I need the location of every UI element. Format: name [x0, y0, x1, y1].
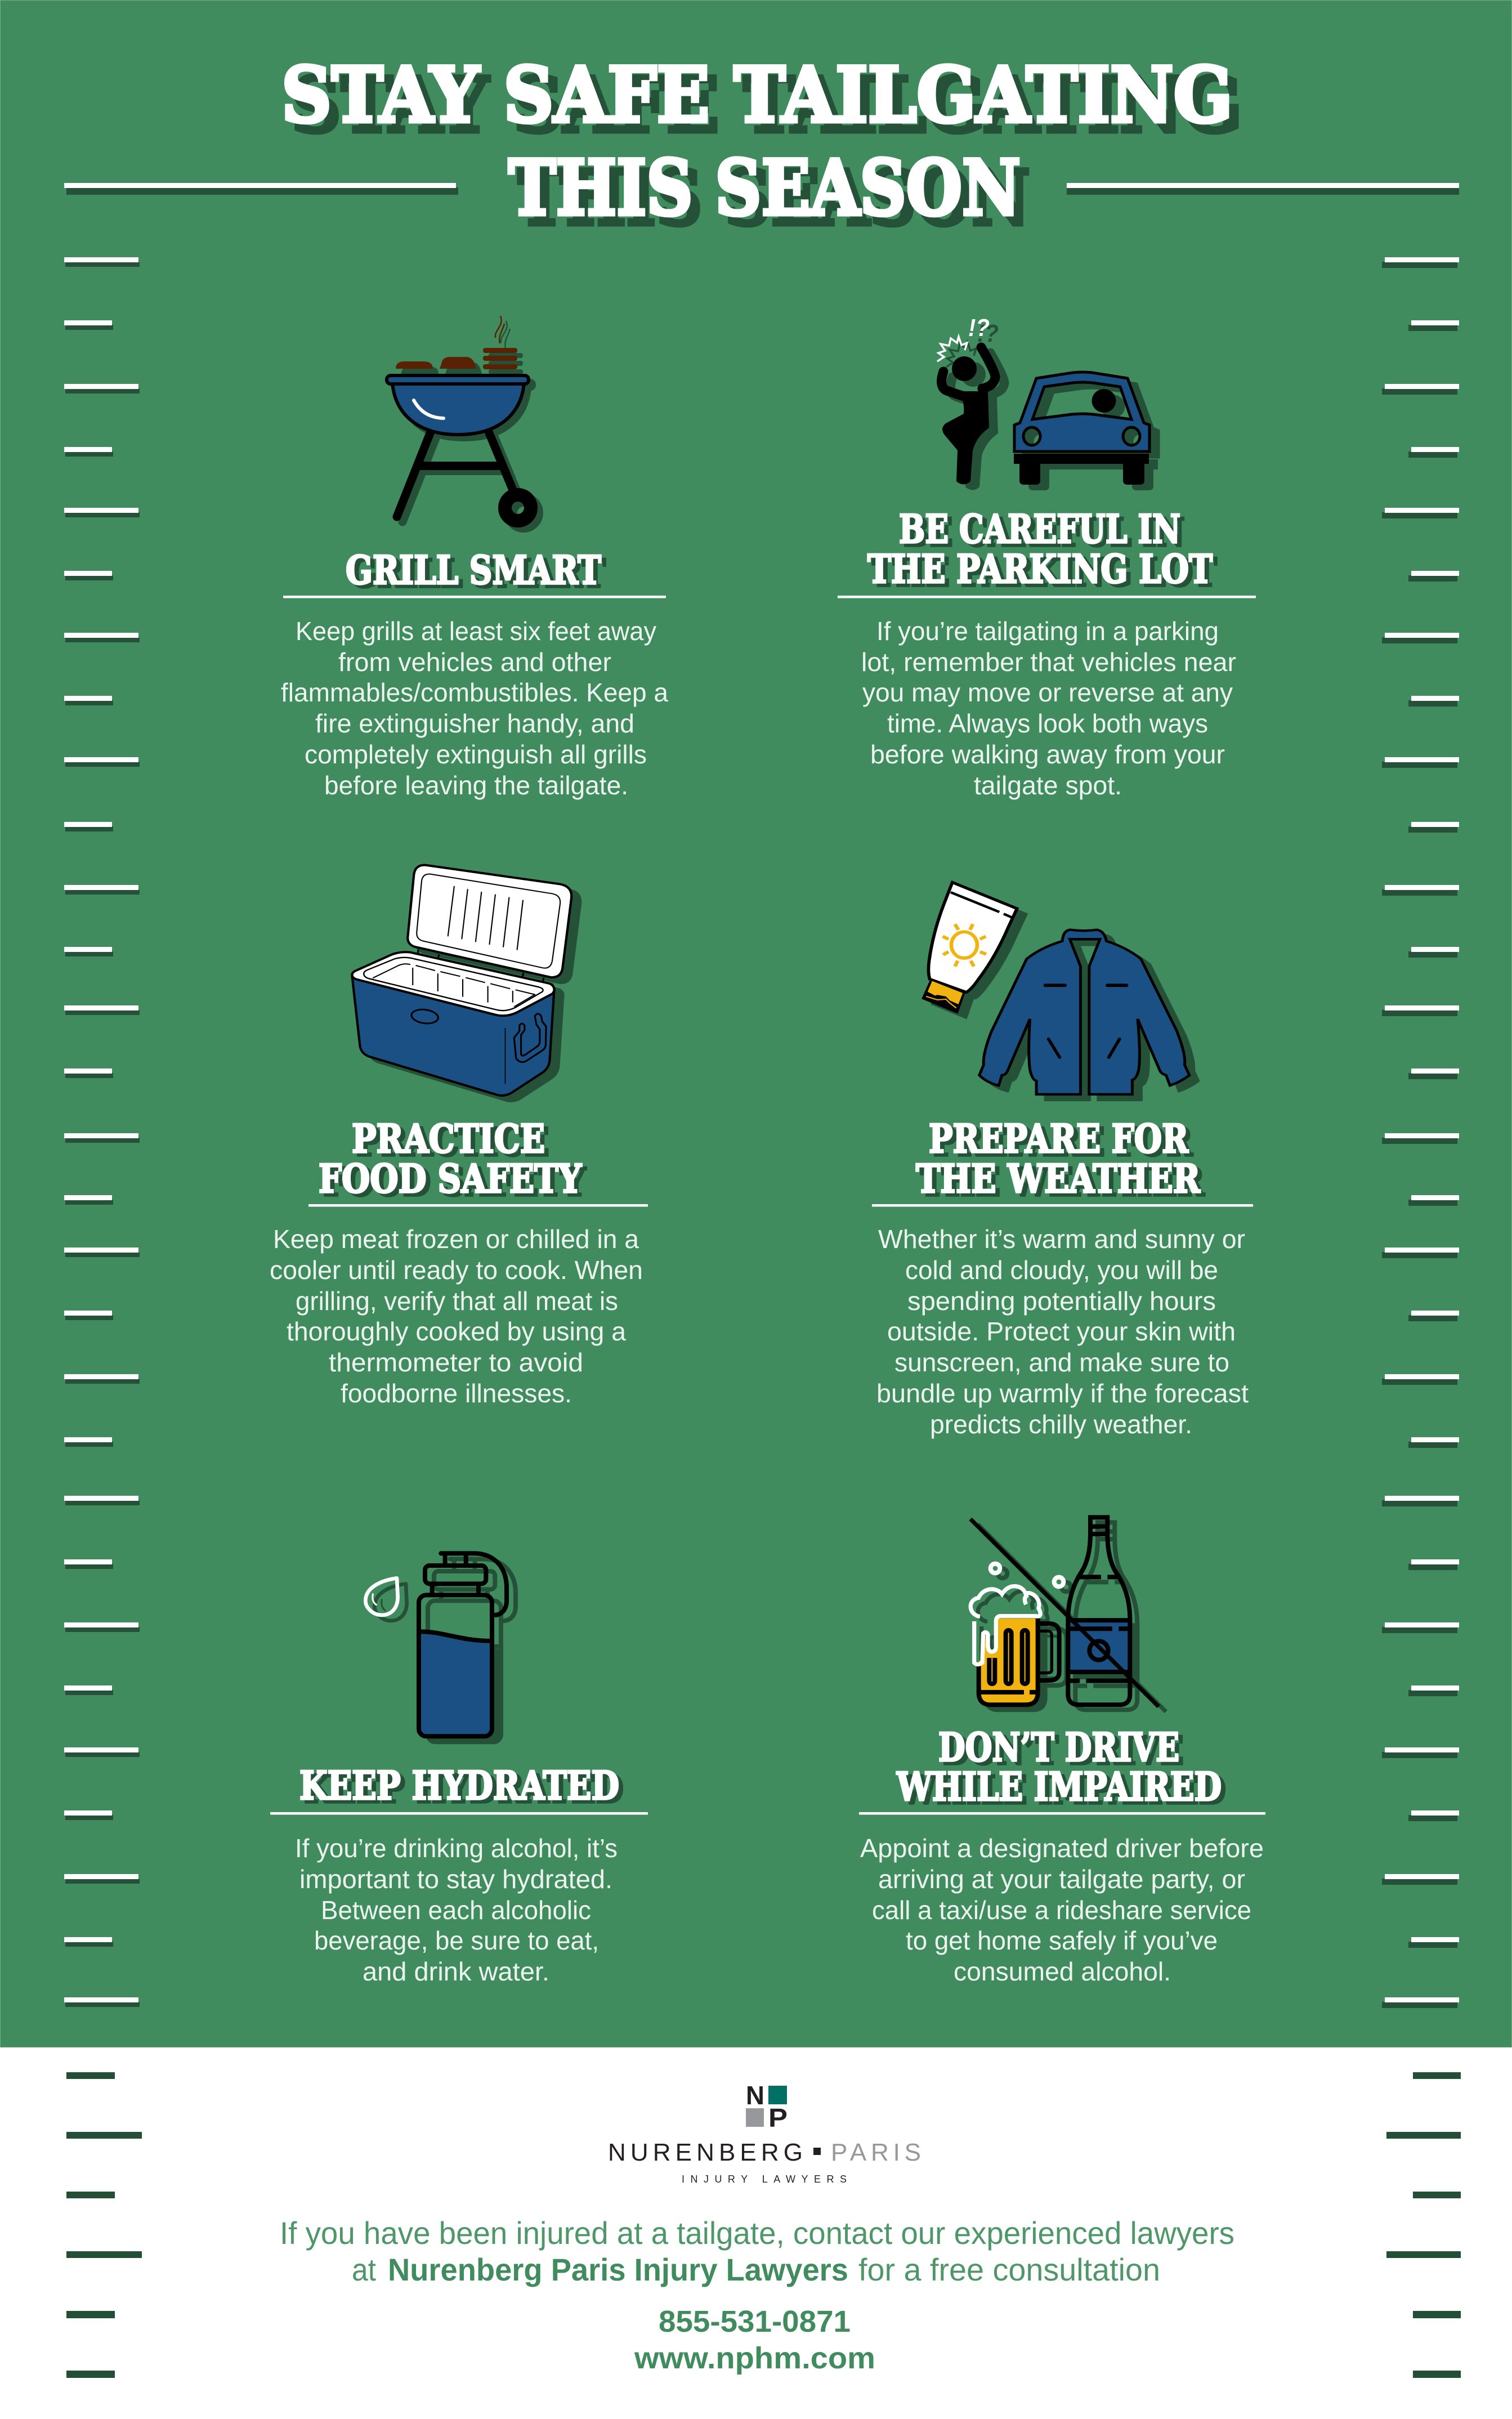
text: grill smart: Keep grills at least six feet away — [296, 616, 656, 646]
heading: keep hydrated: KEEP HYDRATED — [299, 1763, 619, 1809]
text: prepare for the weather: cold and cloudy, you will be — [905, 1255, 1218, 1285]
call to action: for a free consultation — [858, 2252, 1160, 2287]
icon: sunscreen tube — [921, 882, 1017, 1014]
text: food safety: cooler until ready to cook. When — [270, 1255, 643, 1285]
text: don't drive while impaired: call a taxi/use a rideshare service — [872, 1895, 1251, 1925]
left yard lines — [64, 257, 140, 2007]
icon: sunscreen and jacket — [921, 882, 1189, 1094]
icon: jacket — [979, 930, 1189, 1094]
icon: prohibition line — [970, 1519, 1158, 1707]
heading: prepare for the weather: PREPARE FOR — [929, 1116, 1189, 1162]
heading: prepare for the weather: THE WEATHER — [916, 1156, 1201, 1202]
icon: water bottle and drop — [365, 1553, 507, 1736]
text: prepare for the weather: outside. Protect your skin with — [887, 1317, 1236, 1346]
heading rule — [872, 1204, 1253, 1207]
heading: grill smart: GRILL SMART — [346, 548, 601, 593]
logo wordmark: PARIS — [831, 2139, 921, 2166]
text: grill smart: from vehicles and other — [338, 647, 611, 677]
text: food safety: thermometer to avoid — [329, 1348, 583, 1377]
text: keep hydrated: Between each alcoholic — [321, 1895, 591, 1925]
text: keep hydrated: and drink water. — [363, 1957, 549, 1986]
icon: beer mug — [970, 1564, 1063, 1705]
heading rule — [270, 1812, 648, 1815]
title line 1: STAY SAFE TAILGATING — [281, 50, 1233, 140]
right yard lines — [1383, 257, 1459, 2007]
logo wordmark — [608, 2139, 921, 2166]
call to action — [280, 2215, 1234, 2287]
text: prepare for the weather: predicts chilly weather. — [930, 1410, 1192, 1439]
heading rule — [283, 596, 666, 598]
text: prepare for the weather: sunscreen, and make sure to — [894, 1348, 1229, 1377]
panel: parking lot — [838, 314, 1256, 800]
panel: food safety — [270, 865, 648, 1408]
title rule right — [1067, 183, 1459, 195]
text: grill smart: before leaving the tailgate. — [324, 771, 628, 800]
text: grill smart: completely extinguish all grills — [305, 740, 647, 769]
title line 2: THIS SEASON — [508, 143, 1021, 232]
title rule left — [64, 183, 458, 195]
text: prepare for the weather: Whether it’s warm and sunny or — [878, 1224, 1245, 1254]
text: keep hydrated — [295, 1834, 618, 1986]
panel: keep hydrated — [270, 1553, 648, 1986]
text: grill smart: flammables/combustibles. Keep a — [281, 678, 668, 707]
text: parking lot: If you’re tailgating in a parking — [876, 616, 1219, 646]
logo mark: P — [768, 2103, 788, 2132]
title — [281, 50, 1233, 232]
icon: pedestrian and car — [937, 314, 1149, 485]
heading: don't drive while impaired — [896, 1725, 1222, 1810]
text: parking lot: you may move or reverse at any — [862, 678, 1233, 707]
heading: parking lot: THE PARKING LOT — [867, 547, 1213, 592]
text: keep hydrated: If you’re drinking alcohol, it’s — [295, 1834, 618, 1863]
text: parking lot: before walking away from your — [870, 740, 1225, 769]
text: keep hydrated: important to stay hydrated. — [299, 1864, 612, 1894]
panel: grill smart — [281, 316, 668, 800]
icon: water bottle — [419, 1553, 507, 1736]
text: prepare for the weather — [876, 1224, 1249, 1439]
text: grill smart: fire extinguisher handy, and — [315, 709, 634, 738]
footer background — [0, 2047, 1512, 2419]
text: parking lot — [861, 616, 1236, 800]
heading: don't drive while impaired: DON’T DRIVE — [938, 1725, 1179, 1770]
text: keep hydrated: beverage, be sure to eat, — [314, 1926, 599, 1955]
heading rule — [859, 1812, 1265, 1815]
heading: food safety: FOOD SAFETY — [319, 1156, 582, 1202]
heading: parking lot: BE CAREFUL IN — [899, 507, 1180, 552]
text: food safety: foodborne illnesses. — [341, 1379, 572, 1408]
heading: food safety: PRACTICE — [352, 1116, 545, 1162]
text: don't drive while impaired: Appoint a designated driver before — [860, 1834, 1264, 1863]
heading: parking lot — [867, 507, 1213, 592]
text: parking lot: lot, remember that vehicles near — [861, 647, 1236, 677]
heading rule — [838, 596, 1256, 598]
text: don't drive while impaired — [860, 1834, 1264, 1986]
logo mark: N — [746, 2081, 764, 2110]
icon: pedestrian — [942, 347, 995, 484]
panel: don't drive while impaired — [859, 1517, 1265, 1986]
text: food safety — [270, 1224, 643, 1408]
call to action: at — [352, 2252, 376, 2287]
text: prepare for the weather: spending potentially hours — [907, 1286, 1216, 1316]
icon: wine bottle — [1068, 1517, 1130, 1705]
icon: water drop — [365, 1578, 398, 1615]
text: food safety: grilling, verify that all meat is — [296, 1286, 618, 1316]
icon: impact spark — [937, 337, 967, 361]
logo: Nurenberg Paris Injury Lawyers — [608, 2081, 921, 2185]
call to action: Nurenberg Paris Injury Lawyers — [388, 2252, 848, 2287]
call to action: If you have been injured at a tailgate, contact our experienced lawyers — [280, 2215, 1234, 2251]
heading rule — [308, 1204, 648, 1207]
contact: website: www.nphm.com — [634, 2341, 875, 2375]
text: prepare for the weather: bundle up warmly if the forecast — [876, 1379, 1249, 1408]
icon: grill — [387, 316, 531, 521]
heading: don't drive while impaired: WHILE IMPAIRED — [896, 1764, 1222, 1810]
icon: cooler — [352, 865, 571, 1096]
icon: car — [1014, 372, 1149, 485]
text: parking lot: tailgate spot. — [974, 771, 1122, 800]
heading: prepare for the weather — [916, 1116, 1201, 1202]
text: food safety: Keep meat frozen or chilled in a — [273, 1224, 639, 1254]
text: don't drive while impaired: consumed alcohol. — [954, 1957, 1171, 1986]
logo mark — [746, 2081, 788, 2132]
logo tagline: INJURY LAWYERS — [682, 2174, 847, 2185]
text: food safety: thoroughly cooked by using a — [287, 1317, 626, 1346]
footer yard lines — [66, 2072, 1461, 2378]
text: grill smart — [281, 616, 668, 800]
icon: beer and bottle crossed out — [970, 1517, 1158, 1707]
panel: prepare for the weather — [872, 882, 1253, 1439]
contact: phone: 855-531-0871 — [659, 2305, 851, 2338]
logo wordmark: NURENBERG — [608, 2139, 803, 2166]
text: parking lot: time. Always look both ways — [887, 709, 1208, 738]
text: don't drive while impaired: to get home safely if you’ve — [906, 1926, 1218, 1955]
text: don't drive while impaired: arriving at your tailgate party, or — [878, 1864, 1245, 1894]
heading: food safety — [319, 1116, 582, 1202]
icon: exclamation: !? — [968, 314, 990, 342]
